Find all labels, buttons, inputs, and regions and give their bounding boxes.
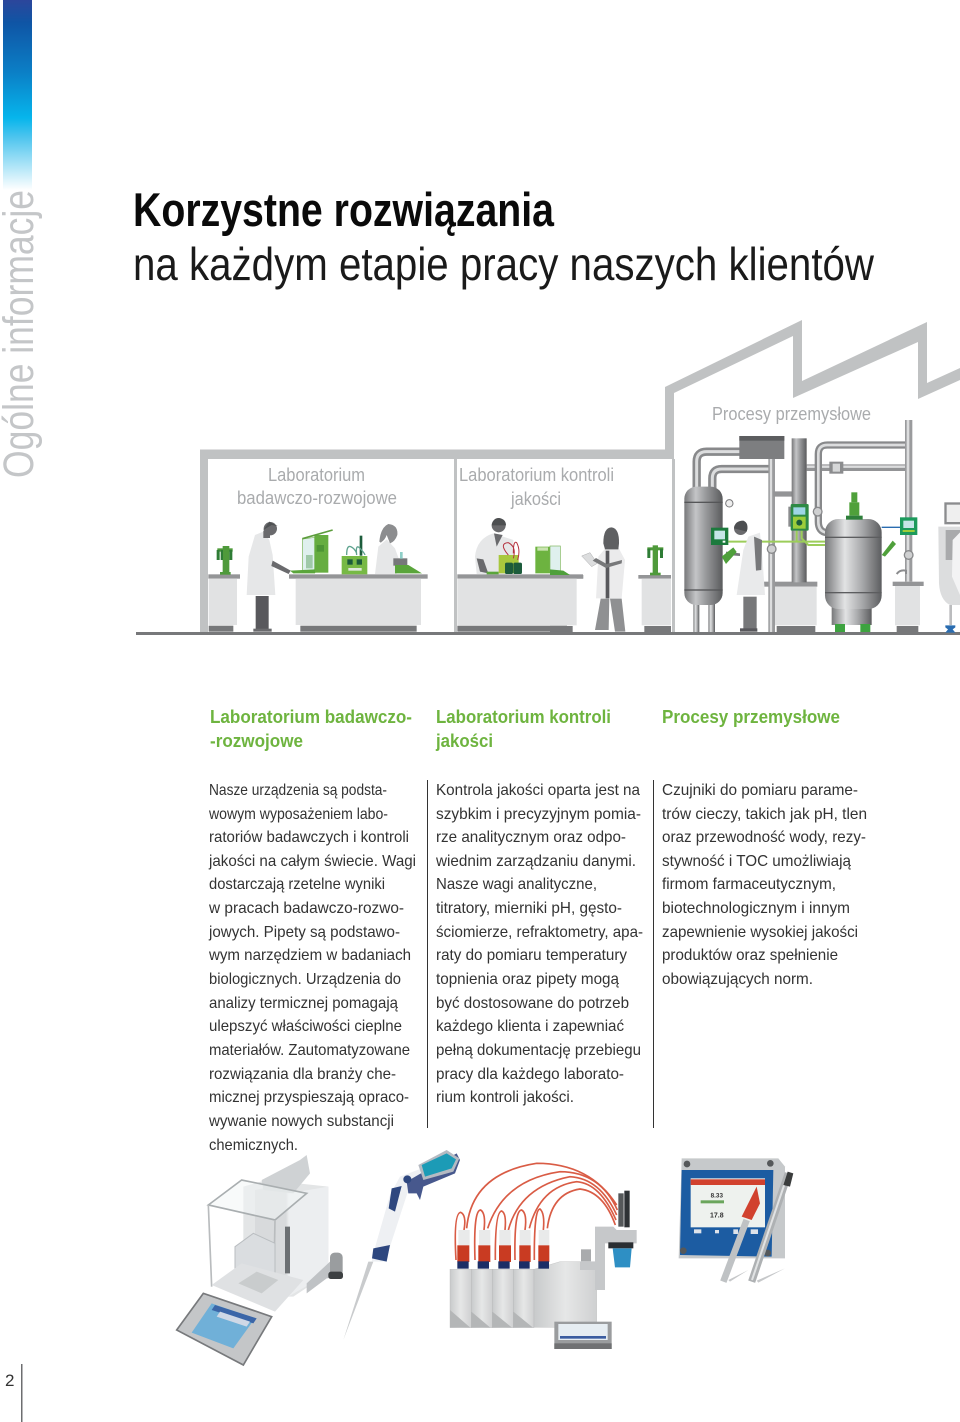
right bench xyxy=(893,582,924,632)
icon: right transmitter xyxy=(900,517,917,535)
text block: research lab xyxy=(208,782,416,1154)
text block: research lab: wowym wyposażeniem labo- xyxy=(208,806,388,823)
icon: reactor kit xyxy=(342,536,367,574)
text block: research lab: w pracach badawczo-rozwo- xyxy=(208,900,404,917)
text block: industrial processes: Czujniki do pomiaru parame- xyxy=(662,782,858,799)
right tank xyxy=(825,519,882,625)
text block: quality lab: być dostosowane do potrzeb xyxy=(436,995,629,1012)
wall divider: factory xyxy=(672,459,675,632)
text block: research lab: ratoriów badawczych i kontroli xyxy=(209,829,409,846)
column dividers xyxy=(427,780,654,1128)
text block: research lab: wym narzędziem w badaniach xyxy=(208,947,411,964)
figure: woman with clipboard xyxy=(582,527,625,632)
text block: industrial processes: biotechnologicznym i innym xyxy=(662,900,850,917)
text block: industrial processes: zapewnienie wysokiej jakości xyxy=(662,924,858,941)
pipework xyxy=(697,420,909,632)
blue gradient side bar xyxy=(3,0,32,190)
title: Korzystne rozwiązania xyxy=(133,183,555,236)
page number: 2 xyxy=(5,1371,14,1390)
photo: electronic pipette xyxy=(343,1150,460,1340)
icon: central transmitter xyxy=(788,504,809,531)
text block: industrial processes: trów cieczy, takich jak pH, tlen xyxy=(662,806,867,823)
text block: research lab: jakości na całym świecie. Wagi xyxy=(208,853,416,870)
vent box xyxy=(739,436,784,459)
icon: tank sensor xyxy=(882,541,896,557)
bench xyxy=(457,574,583,632)
icon: green instrument xyxy=(393,552,422,573)
text block: research lab: Nasze urządzenia są podsta- xyxy=(209,782,387,799)
text block: quality lab: raty do pomiaru temperatury xyxy=(436,947,627,964)
text block: industrial processes: stywność i TOC umożliwiają xyxy=(662,853,851,870)
bench top end xyxy=(550,575,583,632)
heading: quality lab: jakości xyxy=(435,731,493,751)
text block: quality lab: Kontrola jakości oparta jest na xyxy=(436,782,640,799)
central column xyxy=(792,438,807,582)
text block: research lab: dostarczają rzetelne wyniki xyxy=(209,876,385,893)
figure: technician xyxy=(475,518,513,574)
label: industrial processes: Procesy przemysłowe xyxy=(712,404,871,424)
text block: quality lab: pełną dokumentację przebiegu xyxy=(436,1042,641,1059)
icon: tap xyxy=(897,570,906,574)
label: quality control lab: Laboratorium kontroli xyxy=(459,465,614,485)
building outline xyxy=(200,320,960,632)
heading: research lab: -rozwojowe xyxy=(210,731,303,751)
right machine xyxy=(938,502,960,633)
wall divider: lab and quality control xyxy=(454,459,457,632)
text block: industrial processes: firmom farmaceutycznym, xyxy=(662,876,836,893)
figure: researcher with ponytail xyxy=(375,524,399,574)
pipe flange xyxy=(829,462,843,474)
photo: transmitter with sensors: 17.8 xyxy=(710,1212,724,1219)
label: quality control lab xyxy=(459,465,614,509)
left tank xyxy=(684,487,733,632)
icon: green agitator xyxy=(846,492,863,520)
page number rule xyxy=(21,1364,22,1422)
heading: quality lab xyxy=(435,707,611,751)
green instrument with draft shield xyxy=(550,546,571,575)
figure: researcher at balance xyxy=(247,522,291,632)
icon: green analyser xyxy=(535,547,551,573)
signal lines xyxy=(728,531,825,545)
icon: handheld sensor xyxy=(722,547,737,564)
label: research lab: badawczo-rozwojowe xyxy=(237,488,397,508)
text block: quality lab: szybkim i precyzyjnym pomia- xyxy=(436,806,641,823)
text block: industrial processes: obowiązujących norm. xyxy=(662,971,813,988)
icon: tank feet xyxy=(835,624,870,632)
text block: quality lab: każdego klienta i zapewniać xyxy=(436,1018,624,1035)
terminal xyxy=(554,1322,612,1349)
photo: analytical balance xyxy=(177,1155,343,1365)
text block: quality lab: rze analitycznym oraz odpo- xyxy=(436,829,626,846)
blue signal line xyxy=(882,525,901,529)
text block: industrial processes xyxy=(662,782,867,988)
text block: research lab: analizy termicznej pomagają xyxy=(209,995,398,1012)
text block: research lab: wywanie nowych substancji xyxy=(208,1113,394,1130)
text block: quality lab: topnienia oraz pipety mogą xyxy=(436,971,619,988)
icon: titrator with red tubes xyxy=(499,542,522,574)
label: research lab: Laboratorium xyxy=(268,465,365,485)
text block: quality lab: pracy dla każdego laborato- xyxy=(436,1066,624,1083)
bottles xyxy=(457,1230,549,1269)
tube arcs xyxy=(455,1163,617,1260)
text block: industrial processes: oraz przewodność wody, rezy- xyxy=(662,829,866,846)
text block: industrial processes: produktów oraz spełnienie xyxy=(662,947,838,964)
heading: research lab: Laboratorium badawczo- xyxy=(210,707,412,727)
label: research lab xyxy=(237,465,397,508)
text block: quality lab xyxy=(435,782,643,1106)
text block: research lab: materiałów. Zautomatyzowane xyxy=(209,1042,410,1059)
icon: pipette stand xyxy=(217,546,233,575)
label: quality control lab: jakości xyxy=(510,489,561,509)
text block: quality lab: wiednim zarządzaniu danymi. xyxy=(435,853,636,870)
photo: titrator xyxy=(450,1163,637,1349)
text block: quality lab: rium kontroli jakości. xyxy=(436,1089,574,1106)
factory scene xyxy=(550,420,960,633)
units xyxy=(450,1262,597,1328)
photo: transmitter with sensors xyxy=(679,1158,793,1283)
research lab scene xyxy=(208,522,428,632)
title: na każdym etapie pracy naszych klientów xyxy=(133,238,875,290)
figure: operator xyxy=(726,521,765,632)
small side bench xyxy=(208,574,240,632)
floor line xyxy=(136,632,960,635)
text block: research lab: micznej przyspieszają opraco- xyxy=(209,1089,409,1106)
heading: research lab xyxy=(210,707,412,751)
title xyxy=(133,183,875,290)
valves on pipes xyxy=(767,507,913,559)
quality control lab scene xyxy=(457,518,583,632)
text block: quality lab: Nasze wagi analityczne, xyxy=(436,876,597,893)
central bench xyxy=(763,582,817,632)
building illustration xyxy=(136,320,960,635)
text block: quality lab: ściomierze, refraktometry, apa- xyxy=(436,924,643,941)
icon: green analytical balance xyxy=(290,530,333,573)
icon: left transmitter xyxy=(711,528,728,545)
side bench with stand xyxy=(638,545,671,632)
text block: research lab: rozwiązania dla branży che- xyxy=(209,1066,396,1083)
main bench xyxy=(289,574,428,632)
text block: research lab: chemicznych. xyxy=(209,1137,298,1154)
heading: quality lab: Laboratorium kontroli xyxy=(436,707,611,727)
text block: research lab: ulepszyć właściwości cieplne xyxy=(209,1018,402,1035)
text block: research lab: jowych. Pipety są podstawo- xyxy=(208,924,400,941)
stand and head xyxy=(580,1227,637,1290)
text block: research lab: biologicznych. Urządzenia do xyxy=(209,971,401,988)
text block: quality lab: titratory, mierniki pH, gęsto- xyxy=(436,900,622,917)
heading: industrial processes: Procesy przemysłowe xyxy=(662,707,840,727)
photo: transmitter with sensors: 8.33 xyxy=(711,1192,723,1199)
